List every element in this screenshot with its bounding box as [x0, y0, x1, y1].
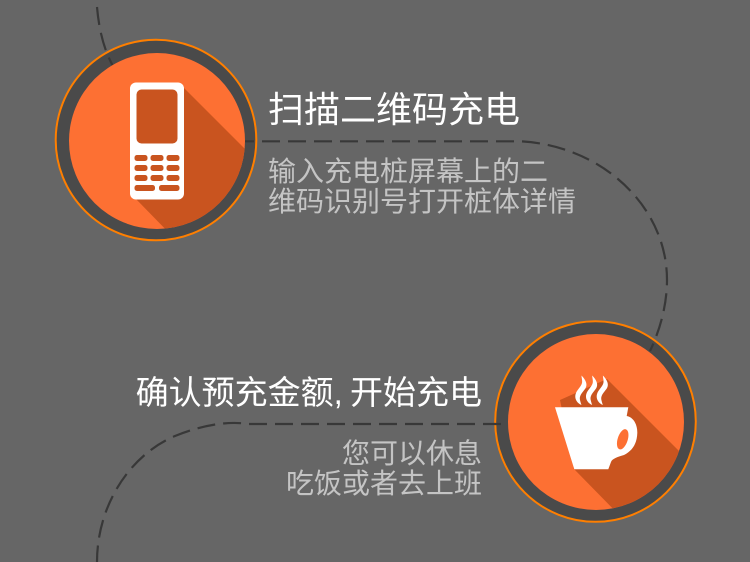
text block: confirm amount description: 吃饭或者去上班: [286, 468, 482, 499]
icon: phone badge: [56, 7, 260, 240]
text block: scan QR description: [268, 156, 576, 217]
arrow: dashed path from phone badge to cup badge: [245, 141, 667, 351]
text block: scan QR description: 输入充电桩屏幕上的二: [268, 156, 548, 187]
text block: confirm amount description: 您可以休息: [342, 438, 482, 469]
text block: scan QR description: 维码识别号打开桩体详情: [268, 186, 576, 217]
text block: confirm amount description: [286, 438, 482, 499]
icon: coffee cup badge: [495, 321, 696, 522]
heading: confirm amount: 确认预充金额, 开始充电: [136, 374, 482, 411]
arrow: dashed path from cup badge downward: [97, 423, 501, 562]
heading: scan QR: 扫描二维码充电: [268, 89, 520, 130]
